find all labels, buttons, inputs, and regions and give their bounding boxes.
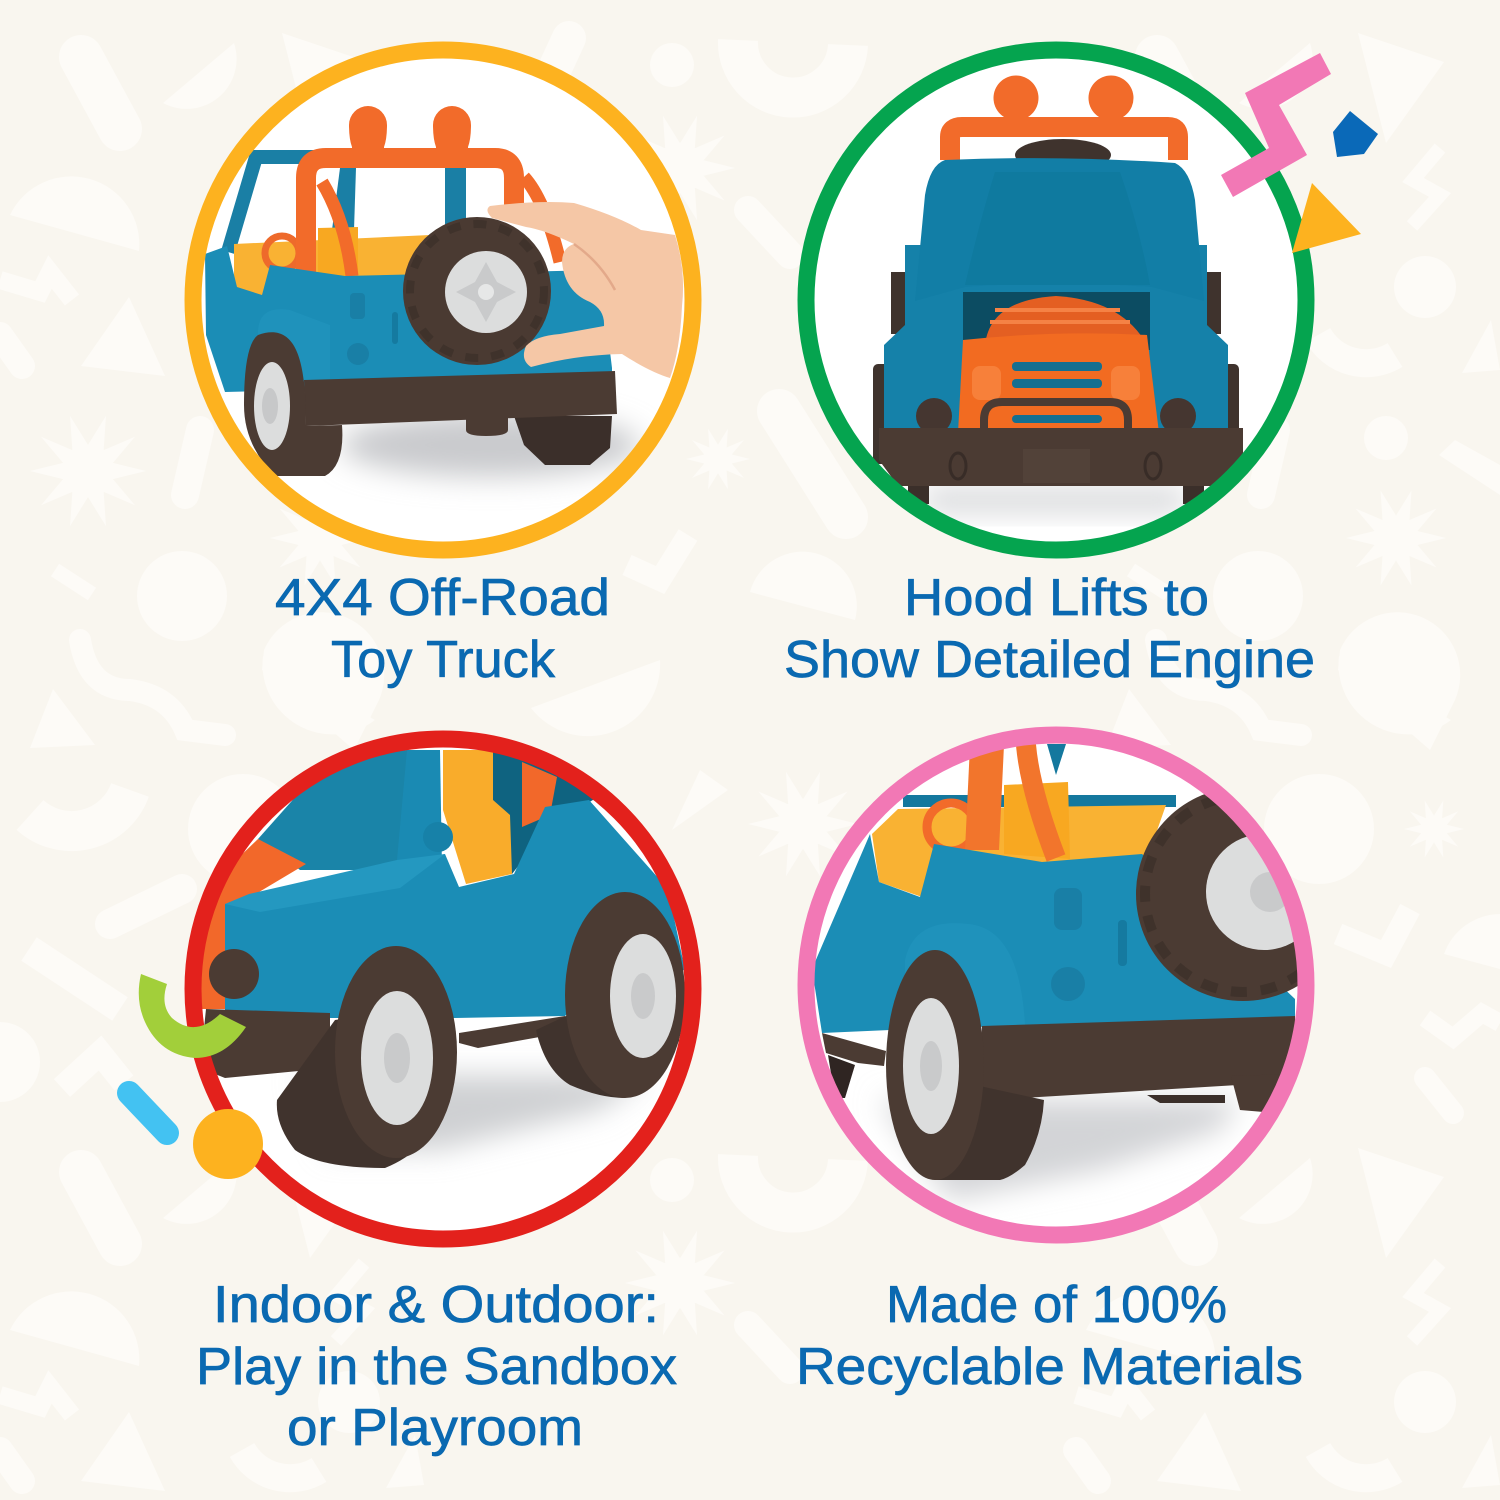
heading: 4X4 Off-Road Toy Truck <box>275 569 610 689</box>
heading: Made of 100% Recyclable Materials <box>796 1276 1303 1396</box>
heading: 4X4 Off-Road Toy Truck: 4X4 Off-Road <box>275 569 610 627</box>
photo: truck side front view <box>190 750 685 1168</box>
heading: Hood Lifts to Show Detailed Engine: Hood Lifts to <box>904 569 1209 627</box>
heading: Indoor and Outdoor, Play in the Sandbox or Playroom <box>196 1276 677 1457</box>
ring: green <box>806 50 1306 550</box>
decoration: green arc <box>139 974 246 1058</box>
decoration: blue pentagon <box>1333 111 1378 157</box>
heading: Hood Lifts to Show Detailed Engine <box>784 569 1315 689</box>
heading: Indoor and Outdoor, Play in the Sandbox or Playroom: Indoor & Outdoor: <box>213 1276 659 1334</box>
heading: Indoor and Outdoor, Play in the Sandbox or Playroom: Play in the Sandbox <box>196 1338 677 1396</box>
heading: Indoor and Outdoor, Play in the Sandbox or Playroom: or Playroom <box>287 1399 583 1457</box>
heading: Made of 100% Recyclable Materials: Made of 100% <box>886 1276 1227 1334</box>
panel: hood lifts to show engine <box>806 50 1306 550</box>
panel: indoor and outdoor <box>190 739 693 1239</box>
ring: pink <box>806 735 1306 1235</box>
decoration: pink zigzag <box>1221 53 1331 197</box>
ring: amber <box>193 50 693 550</box>
panel: 4X4 off-road toy truck <box>193 50 693 550</box>
photo: truck rear corner close-up <box>812 744 1350 1200</box>
heading: Hood Lifts to Show Detailed Engine: Show Detailed Engine <box>784 631 1315 689</box>
panel: recyclable materials <box>806 735 1350 1235</box>
heading: 4X4 Off-Road Toy Truck: Toy Truck <box>331 631 556 689</box>
decoration: light blue capsule <box>129 1093 167 1133</box>
heading: Made of 100% Recyclable Materials: Recyclable Materials <box>796 1338 1303 1396</box>
decoration: yellow triangle <box>1292 183 1361 253</box>
photo: truck rear with hand holding spare tyre <box>205 106 683 477</box>
decoration: yellow dot <box>193 1109 263 1179</box>
ring: red <box>193 739 693 1239</box>
photo: truck front with raised hood and engine <box>873 76 1243 512</box>
